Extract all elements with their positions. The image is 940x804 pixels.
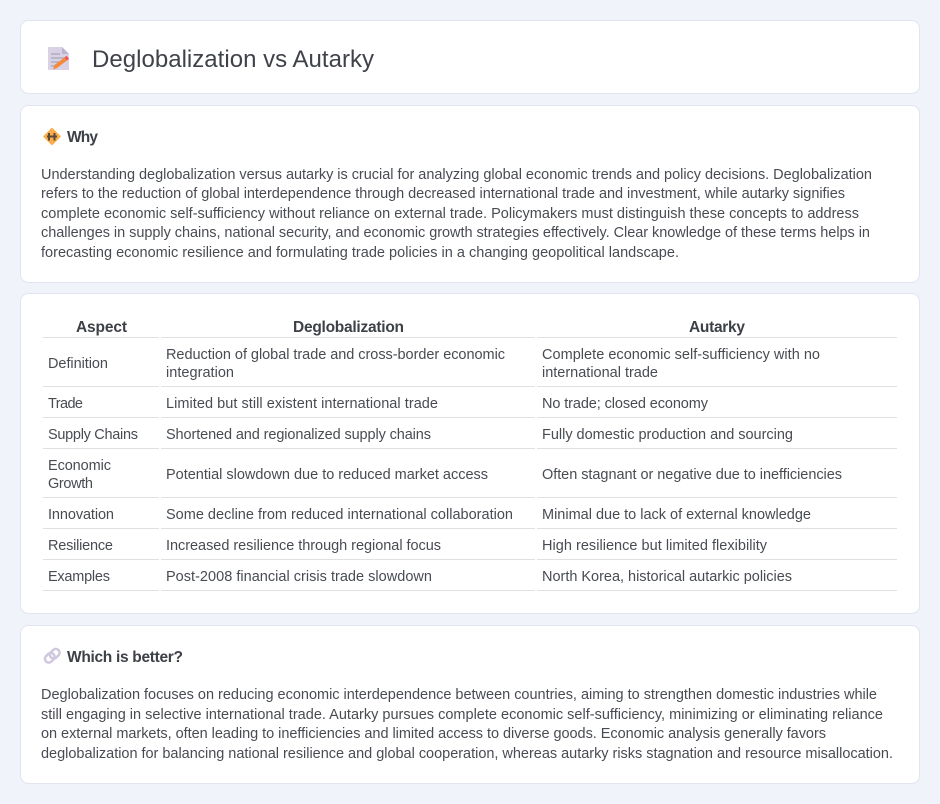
table row: innovation: Innovation xyxy=(48,507,114,523)
table row: economic growth: Potential slowdown due to reduced market access xyxy=(166,467,488,483)
icon: orange diamond sign xyxy=(44,128,60,144)
icon: document with pencil xyxy=(48,47,69,70)
table row: innovation: Minimal due to lack of external knowledge xyxy=(542,507,811,523)
heading: which is better: Which is better? xyxy=(67,649,183,666)
table row: definition: international trade xyxy=(542,365,658,381)
table row: trade: Limited but still existent international trade xyxy=(166,396,438,412)
table row: resilience xyxy=(48,538,768,554)
text block: which is better paragraph: on external markets, often leading to inefficiencies and limited access to diverse goods. Economic analysis generally favors xyxy=(41,726,826,742)
table header row xyxy=(76,319,745,336)
table row: supply chains: Supply Chains xyxy=(48,427,138,443)
table row: innovation xyxy=(48,507,811,523)
table row: definition: Complete economic self-sufficiency with no xyxy=(542,347,820,363)
table header row: Aspect xyxy=(76,319,127,336)
icon: chain link xyxy=(43,647,61,664)
panel: title header xyxy=(20,20,920,94)
panel: comparison table xyxy=(20,294,920,614)
table row: supply chains xyxy=(48,427,793,443)
text block: why paragraph xyxy=(41,167,872,261)
table row: examples: Post-2008 financial crisis trade slowdown xyxy=(166,569,432,585)
table row: economic growth: Economic xyxy=(48,458,111,474)
table row: examples: North Korea, historical autarkic policies xyxy=(542,569,792,585)
text block: why paragraph: challenges in supply chains, national security, and economic growth strategies effectively. Clear knowledge of these terms helps in xyxy=(41,225,870,241)
table row: trade: Trade xyxy=(48,396,83,412)
panel: which is better xyxy=(20,626,920,784)
table row: trade xyxy=(48,396,709,412)
table row: economic growth: Growth xyxy=(48,476,93,492)
table row: supply chains: Shortened and regionalized supply chains xyxy=(166,427,431,443)
table row: definition: Definition xyxy=(48,356,108,372)
text block: why paragraph: refers to the reduction of global interdependence through decreased international trade and investment, while autarky signifies xyxy=(41,186,845,202)
text block: why paragraph: Understanding deglobalization versus autarky is crucial for analyzing global economic trends and policy decisions. Deglobalization xyxy=(41,167,872,183)
table row: definition xyxy=(48,347,820,381)
text block: why paragraph: forecasting economic resilience and formulating trade policies in a changing geopolitical landscape. xyxy=(41,245,679,261)
panel: why xyxy=(20,106,920,282)
table row: economic growth xyxy=(48,458,842,492)
table header row: Autarky xyxy=(689,319,745,336)
text block: which is better paragraph xyxy=(41,687,893,762)
text block: why paragraph: complete economic self-sufficiency without reliance on external trade. Policymakers must distinguish these concepts to address xyxy=(41,206,859,222)
text block: which is better paragraph: deglobalization for balancing national resilience and global cooperation, whereas autarky risks stagnation and resource misallocation. xyxy=(41,746,893,762)
table row: definition: Reduction of global trade and cross-border economic xyxy=(166,347,505,363)
table row: trade: No trade; closed economy xyxy=(542,396,709,412)
table row: supply chains: Fully domestic production and sourcing xyxy=(542,427,793,443)
title: Deglobalization vs Autarky xyxy=(92,46,374,73)
table row: resilience: Resilience xyxy=(48,538,113,554)
text block: which is better paragraph: Deglobalization focuses on reducing economic interdependence between countries, aiming to strengthen domestic industries while xyxy=(41,687,877,703)
table row: definition: integration xyxy=(166,365,234,381)
table row: innovation: Some decline from reduced international collaboration xyxy=(166,507,513,523)
table row: examples: Examples xyxy=(48,569,110,585)
table row: resilience: Increased resilience through regional focus xyxy=(166,538,441,554)
text block: which is better paragraph: still engaging in selective international trade. Autarky pursues complete economic self-sufficiency, minimizing or eliminating reliance xyxy=(41,707,883,723)
table header row: Deglobalization xyxy=(293,319,404,336)
table row: examples xyxy=(48,569,792,585)
table row: economic growth: Often stagnant or negative due to inefficiencies xyxy=(542,467,842,483)
table row: resilience: High resilience but limited flexibility xyxy=(542,538,768,554)
heading: why: Why xyxy=(67,129,98,146)
